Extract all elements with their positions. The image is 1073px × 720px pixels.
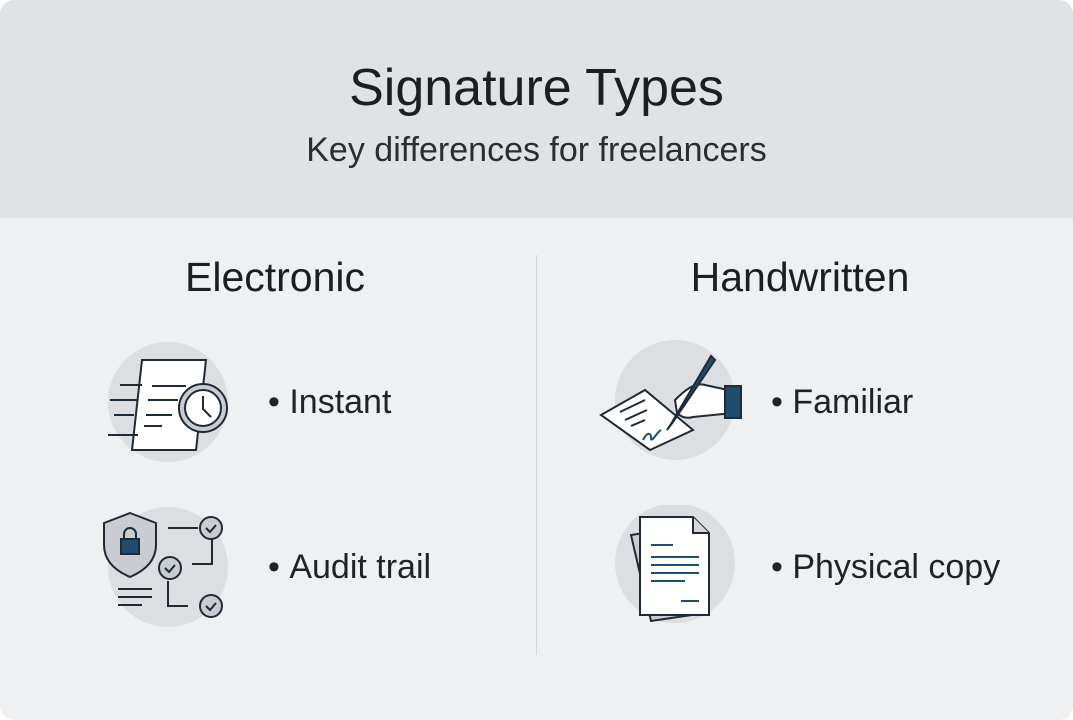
bullet: familiar: • Familiar [771, 383, 913, 421]
bullet: physical copy: • Physical copy [771, 548, 1000, 586]
column heading: handwritten: Handwritten [691, 254, 909, 300]
icon: shield and audit flow [103, 507, 228, 627]
bullet: instant: • Instant [268, 383, 391, 421]
icon: document with clock [108, 342, 228, 462]
subtitle: Key differences for freelancers [306, 131, 767, 169]
bullet: audit trail: • Audit trail [268, 548, 431, 586]
icon: hand signing paper [599, 340, 742, 460]
title: Signature Types [349, 59, 724, 117]
column heading: electronic: Electronic [185, 254, 365, 300]
header band [0, 0, 1073, 218]
icon: stacked documents [615, 505, 735, 623]
